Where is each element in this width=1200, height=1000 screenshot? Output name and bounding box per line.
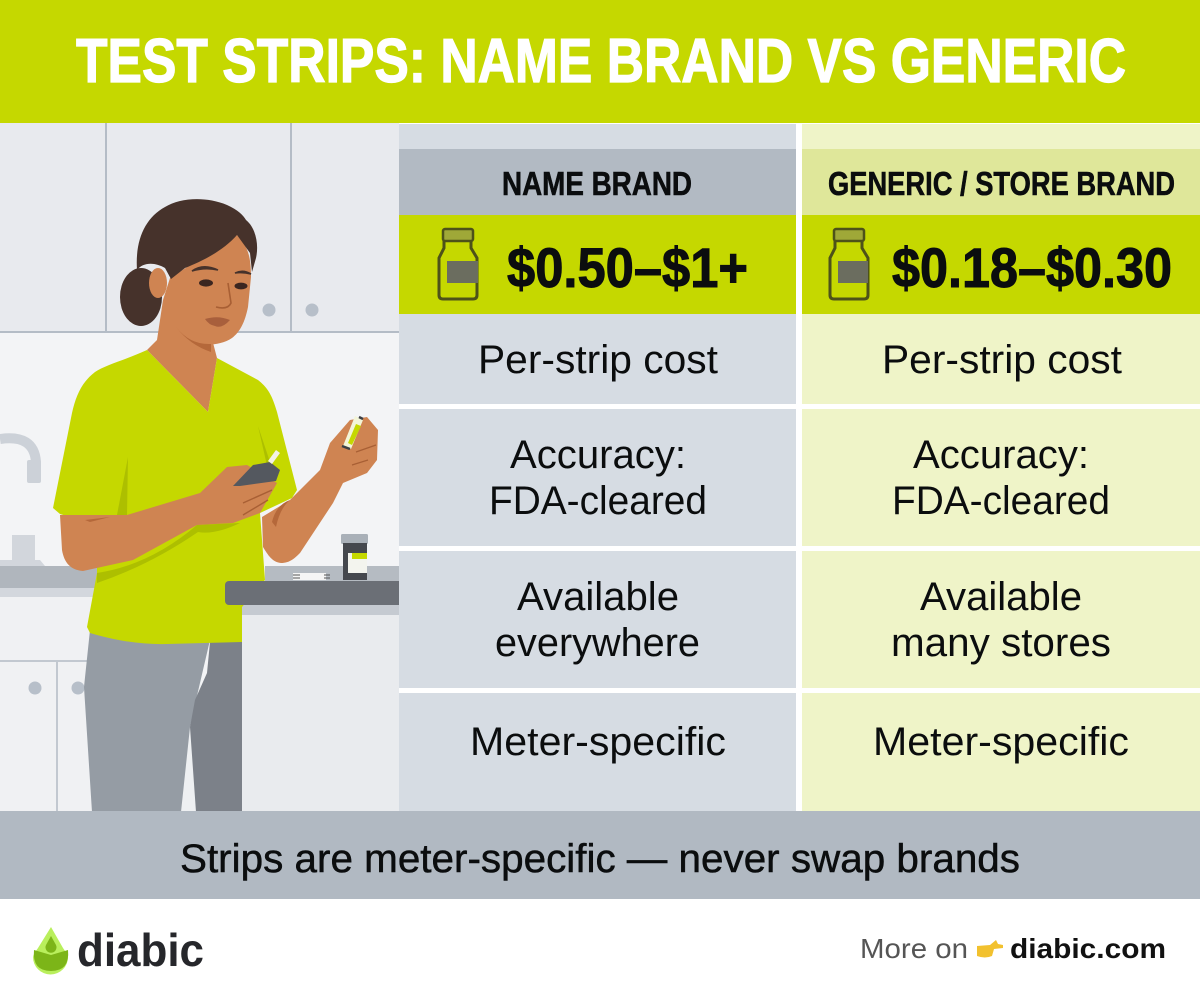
row: accuracy: [892, 433, 1110, 523]
row: accuracy: Accuracy:: [510, 433, 686, 477]
bottom callout band: [0, 811, 1200, 899]
price band: [399, 215, 796, 314]
row: per-strip cost: Per-strip cost: [478, 338, 718, 382]
row: meter-specific: Meter-specific: [470, 720, 726, 764]
counter top: [225, 581, 399, 605]
panel: generic column: [802, 124, 1200, 811]
person illustration: [53, 199, 378, 812]
bottle on counter: [341, 534, 368, 580]
face: [163, 235, 251, 345]
row: accuracy: FDA-cleared: [892, 479, 1110, 523]
column header: [802, 149, 1200, 215]
hair: [137, 199, 257, 279]
price band: $0.18–$0.30: [892, 236, 1172, 299]
pants: [84, 630, 242, 812]
pointing hand icon: [977, 940, 1003, 958]
price band: [802, 215, 1200, 314]
glucose meter: [233, 450, 280, 515]
shirt shadows: [97, 426, 276, 583]
logo: diabic: [77, 924, 204, 976]
row: meter-specific: Meter-specific: [873, 720, 1129, 764]
row: per-strip cost: Per-strip cost: [882, 338, 1122, 382]
shirt: [53, 350, 297, 644]
more on link: More on: [860, 933, 968, 964]
title banner: [0, 0, 1200, 123]
test strips on counter: [293, 573, 330, 580]
row: availability: [891, 575, 1111, 665]
row: availability: [495, 575, 700, 665]
drop icon: [33, 927, 68, 974]
neck: [147, 300, 217, 412]
panel: name brand column: [399, 124, 796, 811]
front arm: [60, 465, 277, 571]
back arm: [262, 417, 378, 563]
row: accuracy: FDA-cleared: [489, 479, 707, 523]
facial features: [192, 267, 251, 327]
hair bun: [120, 268, 162, 326]
test strip in hand: [342, 416, 376, 465]
ear: [149, 268, 167, 298]
column header: [399, 149, 796, 215]
price band: $0.50–$1+: [507, 236, 748, 299]
bottle icon: [830, 229, 868, 299]
row: accuracy: [489, 433, 707, 523]
row: availability: Available: [517, 575, 679, 619]
row: availability: everywhere: [495, 621, 700, 665]
row: availability: Available: [920, 575, 1082, 619]
more on link: [860, 933, 1166, 964]
column header: NAME BRAND: [502, 165, 692, 202]
row: accuracy: Accuracy:: [913, 433, 1089, 477]
row: availability: many stores: [891, 621, 1111, 665]
bottle icon: [439, 229, 478, 299]
bottom callout band: Strips are meter-specific — never swap brands: [180, 837, 1020, 881]
kitchen background: [0, 123, 399, 811]
more on link: diabic.com: [1010, 933, 1166, 964]
